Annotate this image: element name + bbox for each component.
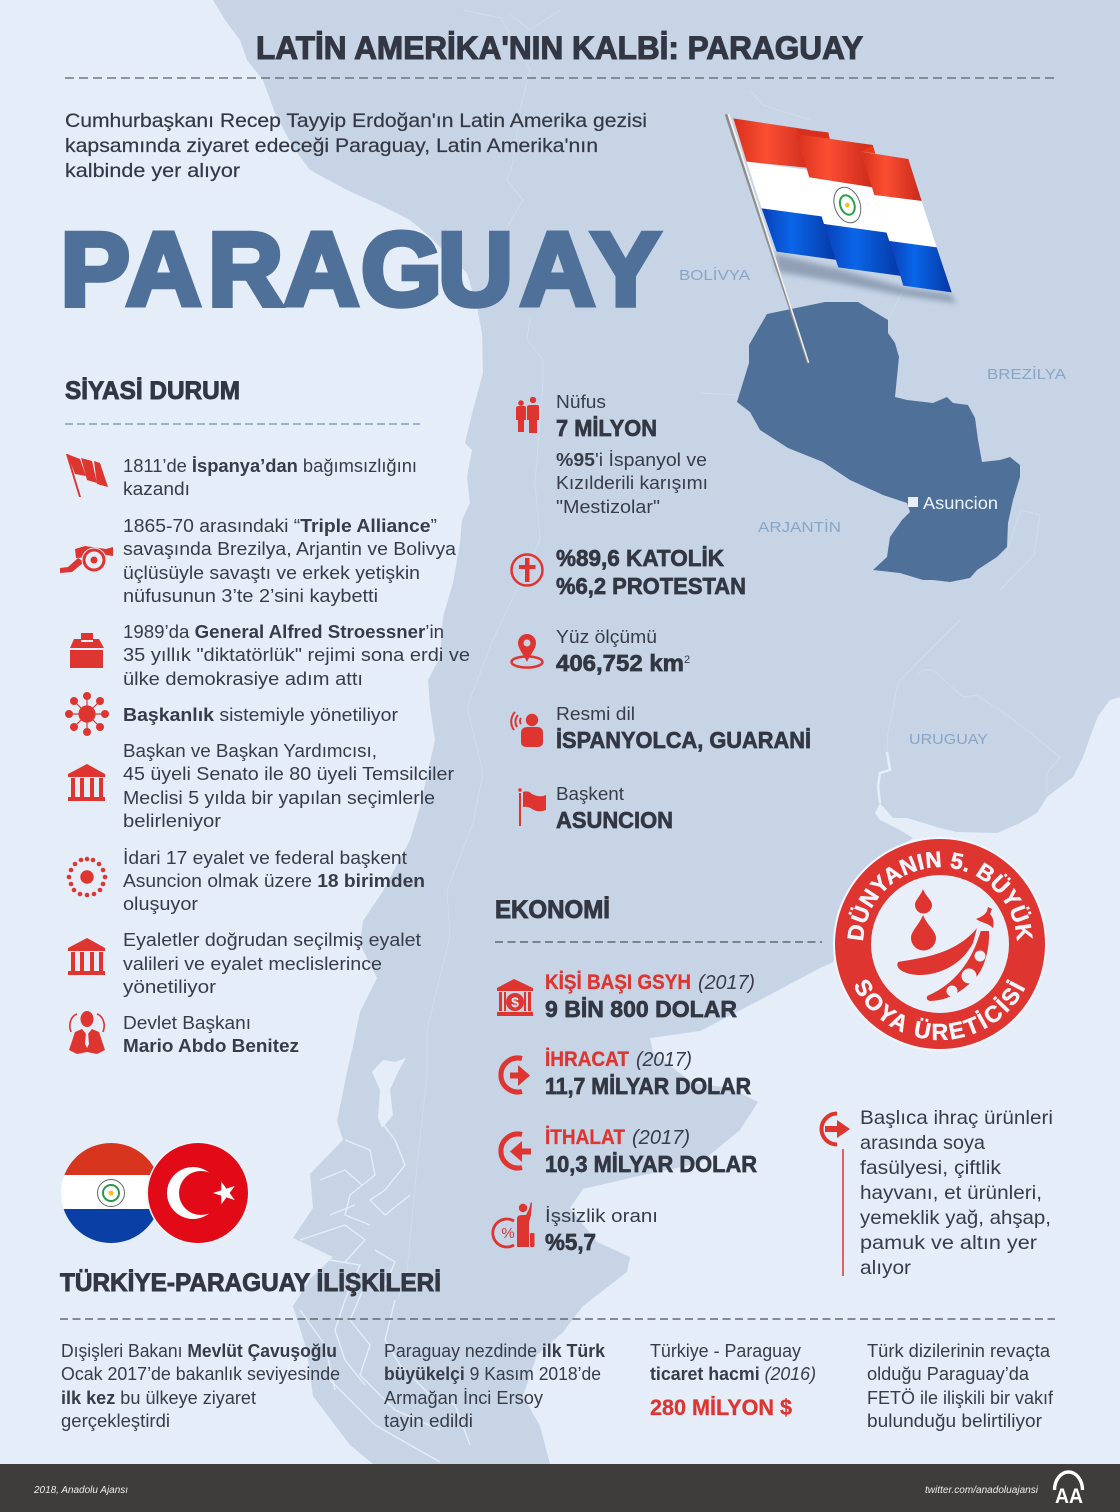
- item: senate: [68, 741, 454, 831]
- icon: cannon: [60, 546, 113, 573]
- item: governors: yönetiliyor: [123, 977, 216, 997]
- icon: bank with dollar: $: [511, 994, 519, 1010]
- icon: cross in circle: [512, 554, 542, 586]
- icon: export arrow: [501, 1058, 530, 1092]
- capital marker: Asuncion: [923, 493, 998, 513]
- item: religion: %6,2 PROTESTAN: [556, 573, 746, 599]
- icon: unemployment person: [493, 1202, 534, 1247]
- map labels: [679, 266, 1066, 748]
- icon: speaking person: [511, 712, 543, 747]
- text: TV series and FETÖ: Türk dizilerinin revaçta: [867, 1341, 1051, 1361]
- heading: Turkey-Paraguay relations: TÜRKİYE-PARAGUAY İLİŞKİLERİ: [60, 1268, 441, 1297]
- callout: main exports: [822, 1107, 1053, 1279]
- item: area: 406,752 km: [556, 650, 684, 676]
- icon: government building: [68, 764, 105, 801]
- icon: import arrow: [501, 1134, 531, 1168]
- icon: AA logo: AA: [1055, 1485, 1083, 1508]
- icon: unemployment person: %: [501, 1225, 515, 1242]
- icon: people: [516, 397, 539, 433]
- item: GDP per capita: (2017): [698, 972, 755, 994]
- item: provinces: [67, 848, 425, 914]
- icon: ballot box: [70, 633, 104, 668]
- icon: AA logo: [1054, 1472, 1083, 1508]
- item: president: [69, 1011, 299, 1056]
- text: foreign minister visit: Dışişleri Bakanı Mevlüt Çavuşoğlu: [61, 1341, 337, 1361]
- item: language: Resmi dil: [556, 704, 635, 724]
- item: Stroessner: [70, 622, 470, 689]
- callout: main exports: alıyor: [860, 1257, 912, 1279]
- map labels: URUGUAY: [909, 731, 988, 748]
- icon: government building: [68, 938, 105, 975]
- text: trade volume: [650, 1341, 816, 1420]
- item: population: Nüfus: [556, 392, 606, 412]
- item: governors: [68, 930, 421, 997]
- item: independence: [66, 454, 417, 499]
- item: senate: Başkan ve Başkan Yardımcısı,: [123, 741, 377, 761]
- item: governors: Eyaletler doğrudan seçilmiş eyalet: [123, 930, 421, 950]
- callout: main exports: Başlıca ihraç ürünleri: [860, 1107, 1053, 1129]
- text: trade volume: ticaret hacmi (2016): [650, 1364, 816, 1384]
- icon: Paraguay round flag: [61, 1143, 154, 1243]
- item: presidential system: Başkanlık sistemiyle yönetiliyor: [123, 705, 398, 725]
- intro text: Cumhurbaşkanı Recep Tayyip Erdoğan'ın Latin Amerika gezisi: [65, 110, 647, 132]
- item: area: Yüz ölçümü: [556, 627, 657, 647]
- map: South America land: [213, 0, 1120, 1464]
- item: capital: [518, 784, 673, 833]
- text: first ambassador: Armağan İnci Ersoy: [384, 1388, 543, 1408]
- item: Triple Alliance: 1865-70 arasındaki “ Triple Alliance ”: [123, 516, 437, 536]
- item: senate: 45 üyeli Senato ile 80 üyeli Temsilciler: [123, 764, 454, 784]
- badge top text: DÜNYANIN 5. BÜYÜK: [847, 851, 1033, 942]
- text: foreign minister visit: [61, 1341, 340, 1431]
- callout: main exports: arasında soya: [860, 1132, 985, 1154]
- text: first ambassador: Paraguay nezdinde ilk Türk: [384, 1341, 606, 1361]
- callout: main exports: hayvanı, et ürünleri,: [860, 1182, 1042, 1204]
- item: presidential system: [66, 693, 398, 735]
- item: GDP per capita: [497, 971, 755, 1022]
- item: capital: ASUNCION: [556, 807, 673, 833]
- intro text: [65, 110, 647, 182]
- icon: network: [66, 693, 108, 735]
- icon: location pin: [512, 634, 542, 668]
- item: Triple Alliance: üçlüsüyle savaştı ve erkek yetişkin: [123, 563, 420, 583]
- big country name: PARAGUAY: [60, 212, 660, 328]
- text: first ambassador: büyükelçi 9 Kasım 2018’de: [384, 1364, 601, 1384]
- map labels: BOLİVYA: [679, 266, 750, 284]
- text: foreign minister visit: Ocak 2017’de bakanlık seviyesinde: [61, 1364, 340, 1384]
- callout: main exports: pamuk ve altın yer: [860, 1232, 1038, 1254]
- item: imports: İTHALAT: [545, 1126, 625, 1149]
- item: president: Devlet Başkanı: [123, 1013, 251, 1033]
- item: GDP per capita: 9 BİN 800 DOLAR: [545, 996, 737, 1022]
- callout: main exports: yemeklik yağ, ahşap,: [860, 1207, 1051, 1229]
- item: Triple Alliance: nüfusunun 3’te 2’sini kaybetti: [123, 586, 378, 606]
- icon: Turkey round flag: [146, 1142, 250, 1244]
- text: TV series and FETÖ: bulunduğu belirtiliyor: [867, 1411, 1042, 1431]
- item: Stroessner: ülke demokrasiye adım attı: [123, 669, 363, 689]
- item: provinces: oluşuyor: [123, 894, 198, 914]
- item: exports: (2017): [636, 1049, 692, 1071]
- item: exports: İHRACAT: [545, 1048, 629, 1071]
- badge: world's 5th largest soy producer: [833, 837, 1047, 1051]
- item: imports: 10,3 MİLYAR DOLAR: [545, 1151, 757, 1177]
- item: Triple Alliance: [60, 516, 457, 606]
- icon: bank with dollar: [497, 979, 533, 1016]
- item: Triple Alliance: savaşında Brezilya, Arjantin ve Bolivya: [123, 539, 457, 559]
- item: provinces: Asuncion olmak üzere 18 birimden: [123, 871, 425, 891]
- item: Stroessner: 1989’da General Alfred Stroessner ’in: [123, 622, 444, 642]
- text: TV series and FETÖ: olduğu Paraguay’da: [867, 1364, 1030, 1384]
- text: trade volume: 280 MİLYON $: [650, 1395, 792, 1420]
- item: senate: Meclisi 5 yılda bir yapılan seçimlerle: [123, 788, 435, 808]
- text: first ambassador: tayin edildi: [384, 1411, 473, 1431]
- text: trade volume: Türkiye - Paraguay: [650, 1341, 801, 1361]
- item: language: İSPANYOLCA, GUARANİ: [556, 727, 811, 753]
- item: senate: belirleniyor: [123, 811, 221, 831]
- text: TV series and FETÖ: FETÖ ile ilişkili bir vakıf: [867, 1388, 1054, 1408]
- badge bottom text: SOYA ÜRETİCİSİ: [854, 979, 1026, 1040]
- item: language: [511, 704, 811, 753]
- item: independence: 1811’de İspanya’dan bağımsızlığını: [123, 456, 417, 476]
- map labels: BREZİLYA: [987, 365, 1066, 383]
- intro text: kapsamında ziyaret edeceği Paraguay, Latin Amerika'nın: [65, 135, 598, 157]
- map labels: ARJANTİN: [758, 518, 841, 536]
- item: population: [516, 392, 708, 517]
- item: president: Mario Abdo Benitez: [123, 1036, 299, 1056]
- item: capital: Başkent: [556, 784, 624, 804]
- item: area: [512, 627, 690, 676]
- icon: flag: [518, 788, 546, 826]
- item: unemployment: İşsizlik oranı: [545, 1206, 658, 1226]
- item: independence: kazandı: [123, 479, 190, 499]
- item: population: %95'i İspanyol ve: [556, 450, 707, 470]
- item: unemployment: %5,7: [545, 1229, 596, 1255]
- icon: oil drops and soybean: [897, 889, 994, 1002]
- icon: red flag: [66, 454, 108, 497]
- item: Stroessner: 35 yıllık "diktatörlük" rejimi sona erdi ve: [123, 645, 470, 665]
- item: GDP per capita: KİŞİ BAŞI GSYH: [545, 971, 691, 994]
- icon: man in suit: [69, 1011, 105, 1054]
- icon: dotted circle: [67, 857, 107, 897]
- item: imports: (2017): [632, 1127, 690, 1149]
- icon: Paraguay waving flag: [725, 113, 957, 363]
- text: foreign minister visit: gerçekleştirdi: [61, 1411, 170, 1431]
- item: religion: [512, 545, 746, 599]
- map: Paraguay: [737, 302, 1020, 582]
- item: unemployment: [493, 1202, 658, 1255]
- item: population: 7 MİLYON: [556, 415, 657, 441]
- text: TV series and FETÖ: [867, 1341, 1054, 1431]
- callout: main exports: fasülyesi, çiftlik: [860, 1157, 1001, 1179]
- item: exports: [501, 1048, 751, 1099]
- text: foreign minister visit: ilk kez bu ülkeye ziyaret: [61, 1388, 256, 1408]
- footer bar: [0, 1464, 1120, 1512]
- footer twitter handle: twitter.com/anadoluajansi: [925, 1484, 1039, 1496]
- item: area: 2: [684, 654, 690, 666]
- intro text: kalbinde yer alıyor: [65, 160, 241, 182]
- item: exports: 11,7 MİLYAR DOLAR: [545, 1073, 751, 1099]
- heading: Ekonomi: EKONOMİ: [495, 896, 610, 924]
- item: governors: valileri ve eyalet meclislerince: [123, 954, 382, 974]
- item: population: Kızılderili karışımı: [556, 473, 708, 493]
- heading: Siyasi Durum: SİYASİ DURUM: [65, 377, 240, 405]
- item: provinces: İdari 17 eyalet ve federal başkent: [123, 848, 407, 868]
- icon: export arrow: [822, 1114, 850, 1144]
- footer credit: 2018, Anadolu Ajansı: [33, 1485, 128, 1496]
- item: population: "Mestizolar": [556, 497, 660, 517]
- item: imports: [501, 1126, 757, 1177]
- item: religion: %89,6 KATOLİK: [556, 545, 724, 571]
- text: first ambassador: [384, 1341, 606, 1431]
- title: LATİN AMERİKA'NIN KALBİ: PARAGUAY: [256, 30, 863, 66]
